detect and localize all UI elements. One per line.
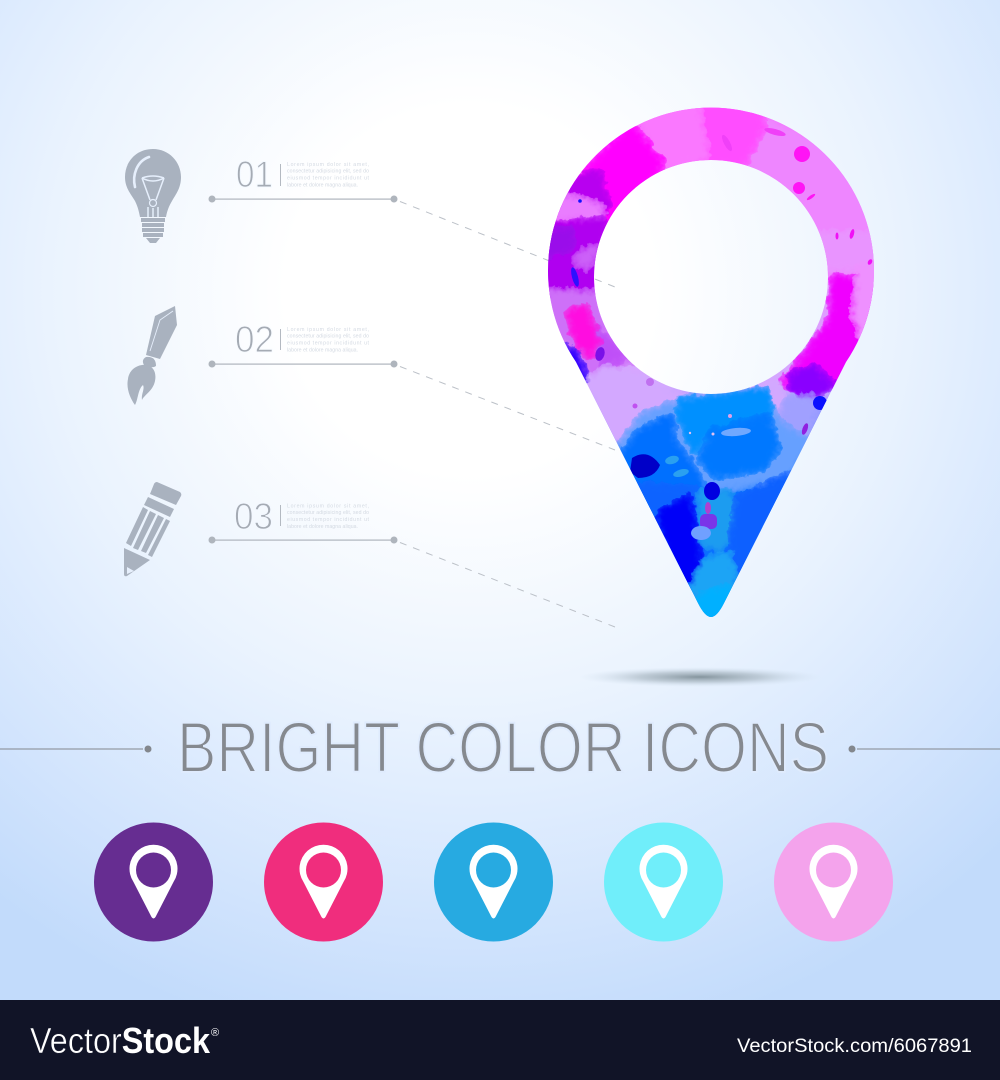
- watercolor splatter spots: [570, 126, 873, 540]
- number 01: 01: [236, 154, 273, 195]
- number 02: 02: [235, 319, 274, 360]
- icon: paint brush: [127, 306, 177, 405]
- description 01: eiusmod tempor incididunt ut: [287, 176, 370, 182]
- description 01: [287, 162, 370, 188]
- title rule right: [848, 746, 1000, 752]
- description 02: Lorem ipsum dolor sit amet,: [287, 327, 369, 333]
- description 02: eiusmod tempor incididunt ut: [287, 340, 370, 346]
- footer url: VectorStock.com/6067891: [737, 1036, 972, 1057]
- icon: pink pin button: [264, 822, 383, 942]
- description 02: [287, 327, 370, 354]
- description 03: consectetur adipisicing elit, sed do: [287, 510, 369, 516]
- title: BRIGHT COLOR ICONS: [177, 709, 829, 788]
- item 02: [208, 319, 398, 368]
- description 02: labore et dolore magna aliqua.: [287, 348, 358, 354]
- footer bar: [0, 1000, 1000, 1080]
- dashed leader lines: [400, 202, 615, 627]
- description 03: Lorem ipsum dolor sit amet,: [287, 504, 369, 510]
- pin shadow: [578, 667, 822, 687]
- number 03: 03: [234, 496, 273, 537]
- icon: pencil: [124, 482, 181, 576]
- icon: light bulb: [125, 149, 181, 243]
- main watercolor map pin: [548, 108, 874, 617]
- description 03: [287, 504, 370, 530]
- item 01: [208, 154, 398, 202]
- description 02: consectetur adipisicing elit, sed do: [287, 334, 369, 340]
- icon: blue pin button: [434, 822, 553, 942]
- description 03: labore et dolore magna aliqua.: [287, 524, 358, 530]
- icon: purple pin button: [94, 822, 213, 942]
- footer logo: VectorStock: [30, 1020, 211, 1061]
- connector 02: [208, 360, 398, 368]
- connector 01: [208, 196, 398, 202]
- title rule left: [0, 746, 152, 752]
- description 03: eiusmod tempor incididunt ut: [287, 517, 370, 523]
- item 03: [208, 496, 398, 544]
- icon: cyan pin button: [604, 822, 723, 942]
- description 01: Lorem ipsum dolor sit amet,: [287, 162, 369, 168]
- icon: light pink pin button: [774, 822, 893, 942]
- description 01: labore et dolore magna aliqua.: [287, 182, 358, 188]
- description 01: consectetur adipisicing elit, sed do: [287, 168, 369, 174]
- connector 03: [208, 536, 398, 544]
- footer bar: ®: [211, 1027, 219, 1039]
